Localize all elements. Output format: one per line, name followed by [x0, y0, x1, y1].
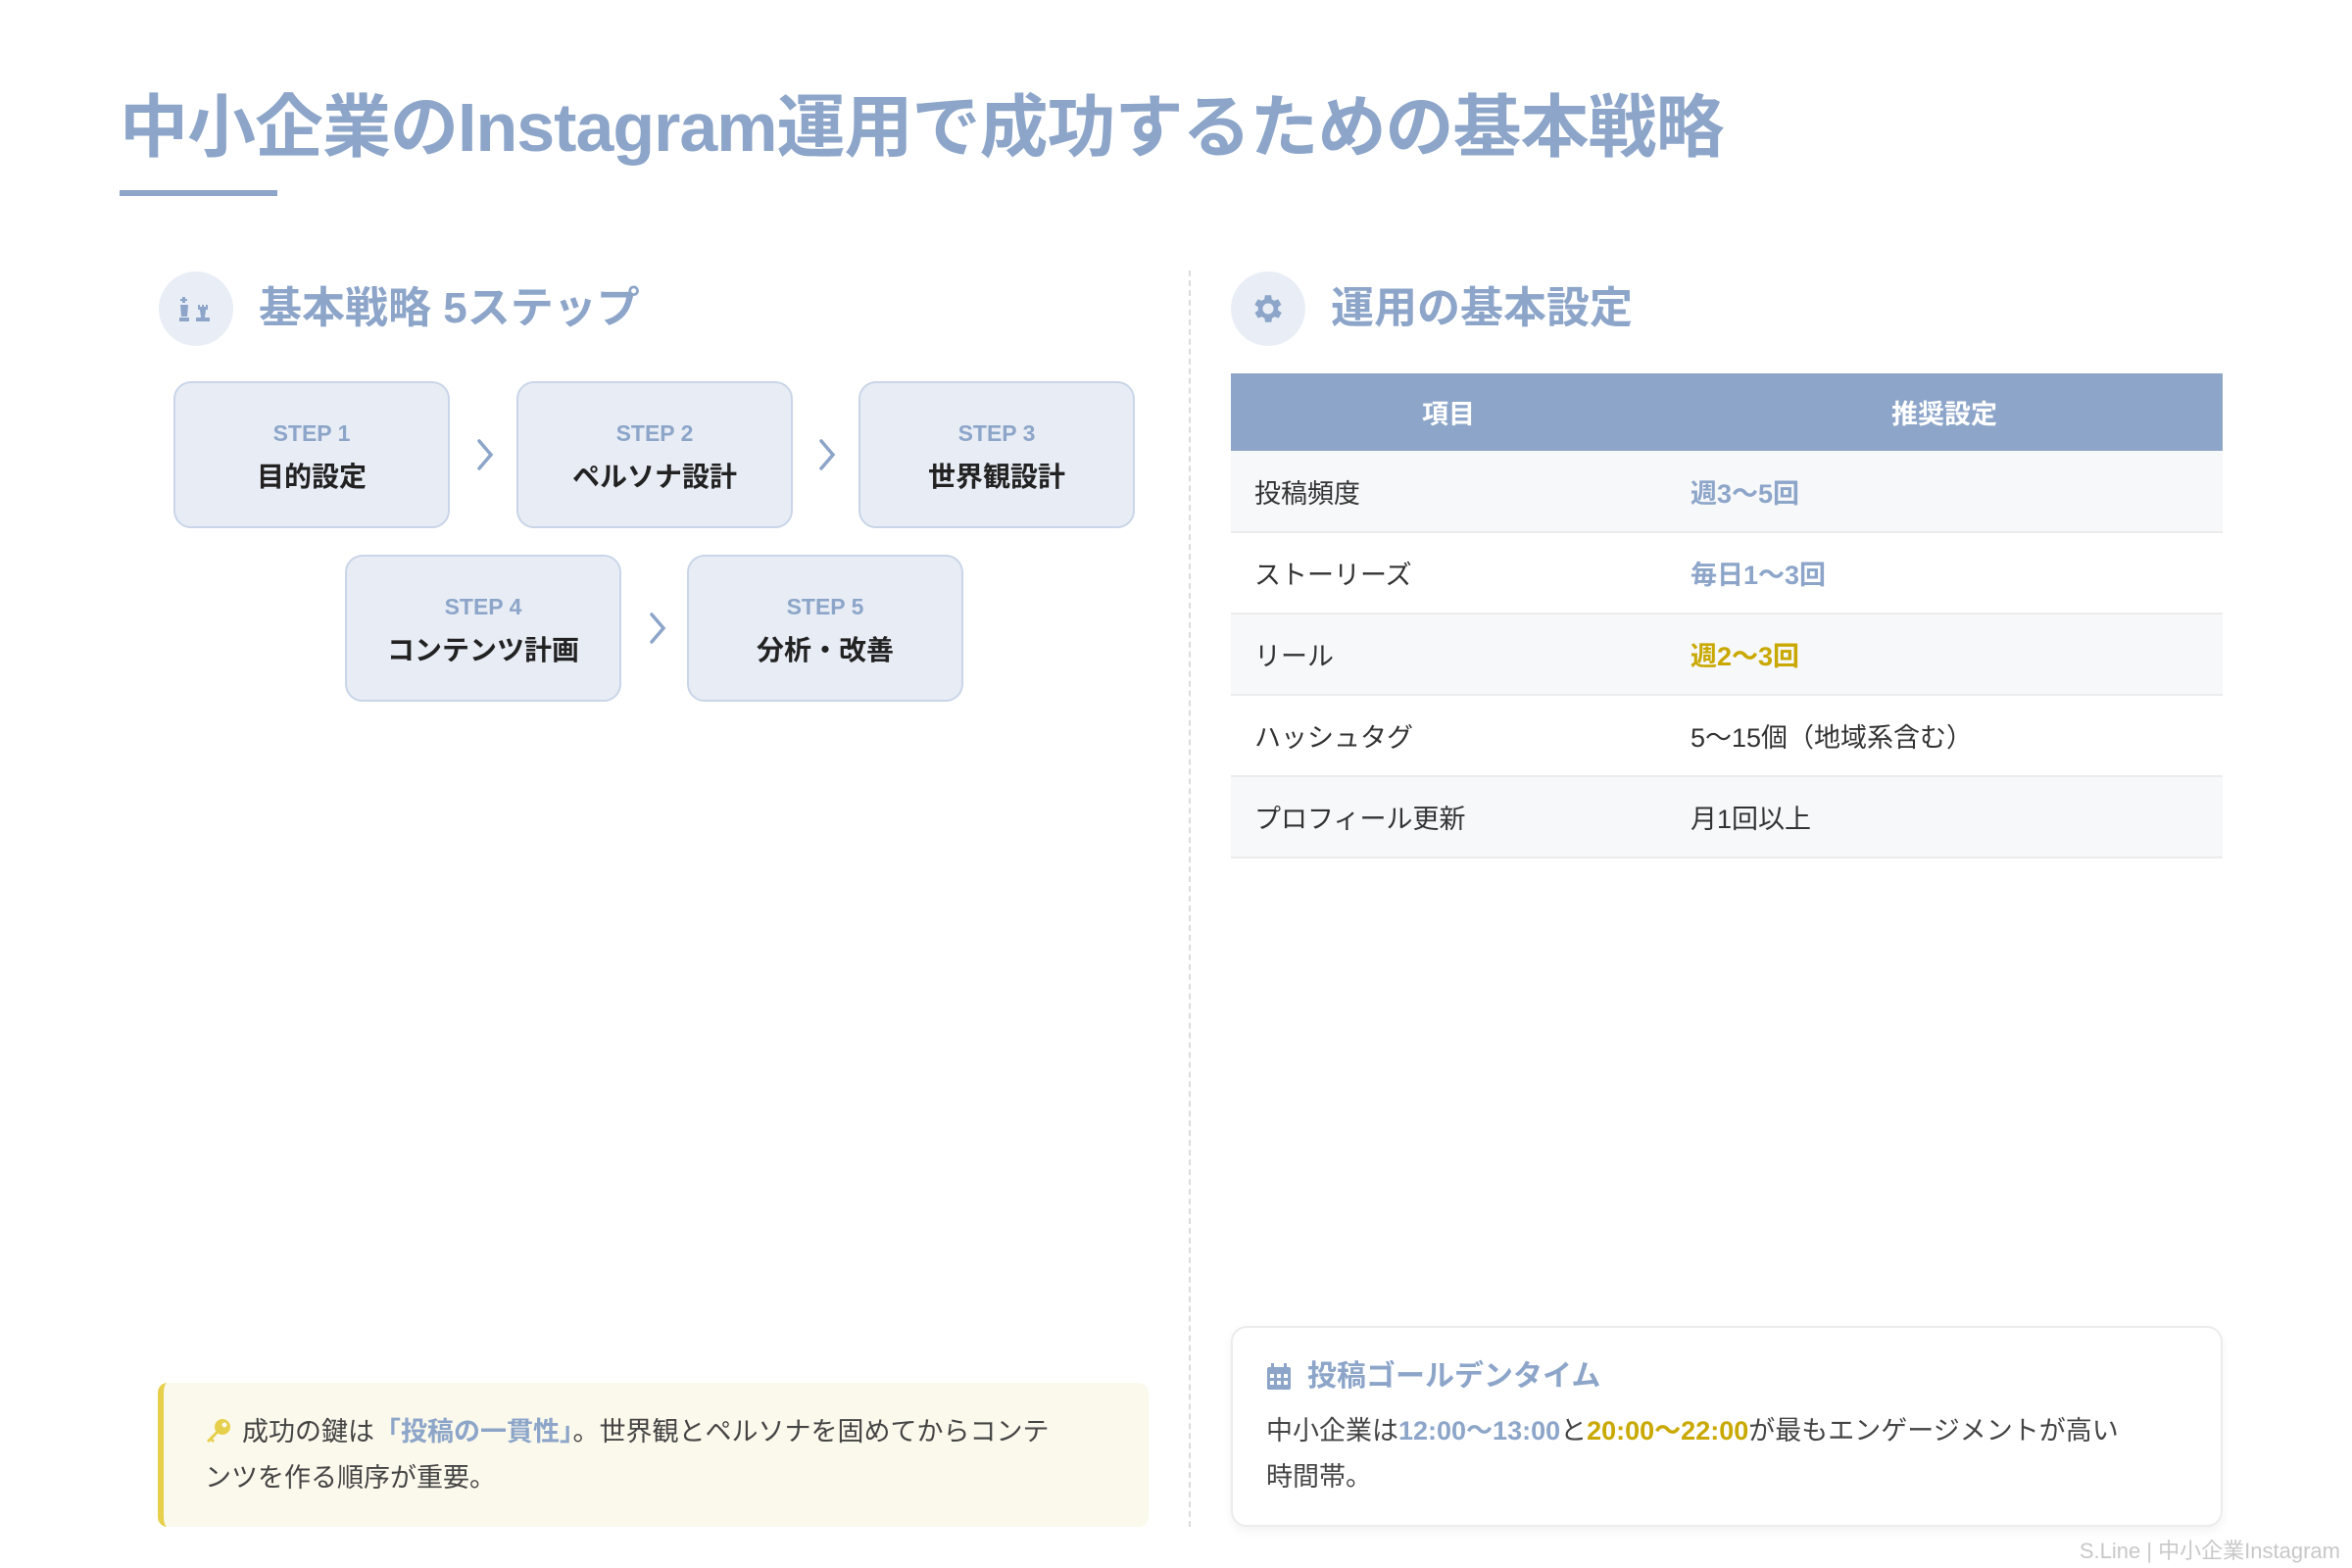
card: golden time: [1231, 1326, 2223, 1527]
callout: key insight: 成功の鍵は「投稿の一貫性」。世界観とペルソナを固めてからコンテ: [242, 1417, 1049, 1446]
icon: key: [207, 1419, 230, 1443]
settings table: 週3〜5回: [1690, 478, 1799, 508]
step 3: 世界観設計: [928, 462, 1065, 492]
title underline: [120, 190, 277, 196]
heading: 基本戦略 5ステップ: 基本戦略 5ステップ: [259, 284, 640, 332]
left section header: [159, 271, 640, 346]
arrow 3: [650, 612, 666, 644]
step 1: STEP 1: [273, 420, 350, 446]
settings table: リール: [1254, 642, 1334, 671]
settings table: ストーリーズ: [1254, 561, 1412, 590]
step 5: 分析・改善: [757, 635, 894, 665]
title: 中小企業のInstagram運用で成功するための基本戦略: [120, 89, 1724, 166]
step 4: STEP 4: [445, 594, 521, 619]
heading: 運用の基本設定: 運用の基本設定: [1331, 284, 1633, 332]
step 2: STEP 2: [616, 420, 693, 446]
step 1: [173, 381, 450, 528]
step 3: [858, 381, 1135, 528]
step 1: 目的設定: [257, 462, 367, 492]
card body: 時間帯。: [1266, 1462, 1372, 1492]
right section header: [1231, 271, 1633, 346]
settings table: 毎日1〜3回: [1690, 561, 1826, 590]
settings table: ハッシュタグ: [1254, 723, 1413, 753]
settings table: 週2〜3回: [1690, 642, 1799, 671]
step 2: ペルソナ設計: [572, 462, 737, 492]
step 5: STEP 5: [787, 594, 863, 619]
callout: key insight: [158, 1383, 1149, 1527]
callout: key insight: ンツを作る順序が重要。: [205, 1463, 496, 1493]
settings table: 推奨設定: [1891, 400, 1997, 429]
arrow 2: [819, 439, 835, 470]
arrow 1: [477, 439, 494, 470]
icon: calendar: [1267, 1363, 1291, 1390]
card heading: 投稿ゴールデンタイム: [1307, 1360, 1600, 1393]
step 3: STEP 3: [958, 420, 1035, 446]
icon: gear: [1231, 271, 1305, 346]
settings table: プロフィール更新: [1254, 805, 1465, 834]
step 2: [516, 381, 793, 528]
card body: [1266, 1416, 2119, 1492]
card body: 中小企業は12:00〜13:00と20:00〜22:00が最もエンゲージメントが高い: [1266, 1416, 2119, 1446]
settings table: 5〜15個（地域系含む）: [1690, 723, 1973, 753]
settings table: 月1回以上: [1690, 805, 1811, 834]
settings table: 投稿頻度: [1254, 478, 1360, 508]
step 4: コンテンツ計画: [387, 635, 579, 665]
footer credit: S.Line | 中小企業Instagram: [2080, 1539, 2340, 1563]
icon: chess pieces: [159, 271, 233, 346]
step 4: [345, 555, 621, 702]
steps flow: [173, 381, 1135, 702]
settings table: [1231, 373, 2223, 858]
step 5: [687, 555, 963, 702]
settings table: 項目: [1422, 400, 1475, 429]
